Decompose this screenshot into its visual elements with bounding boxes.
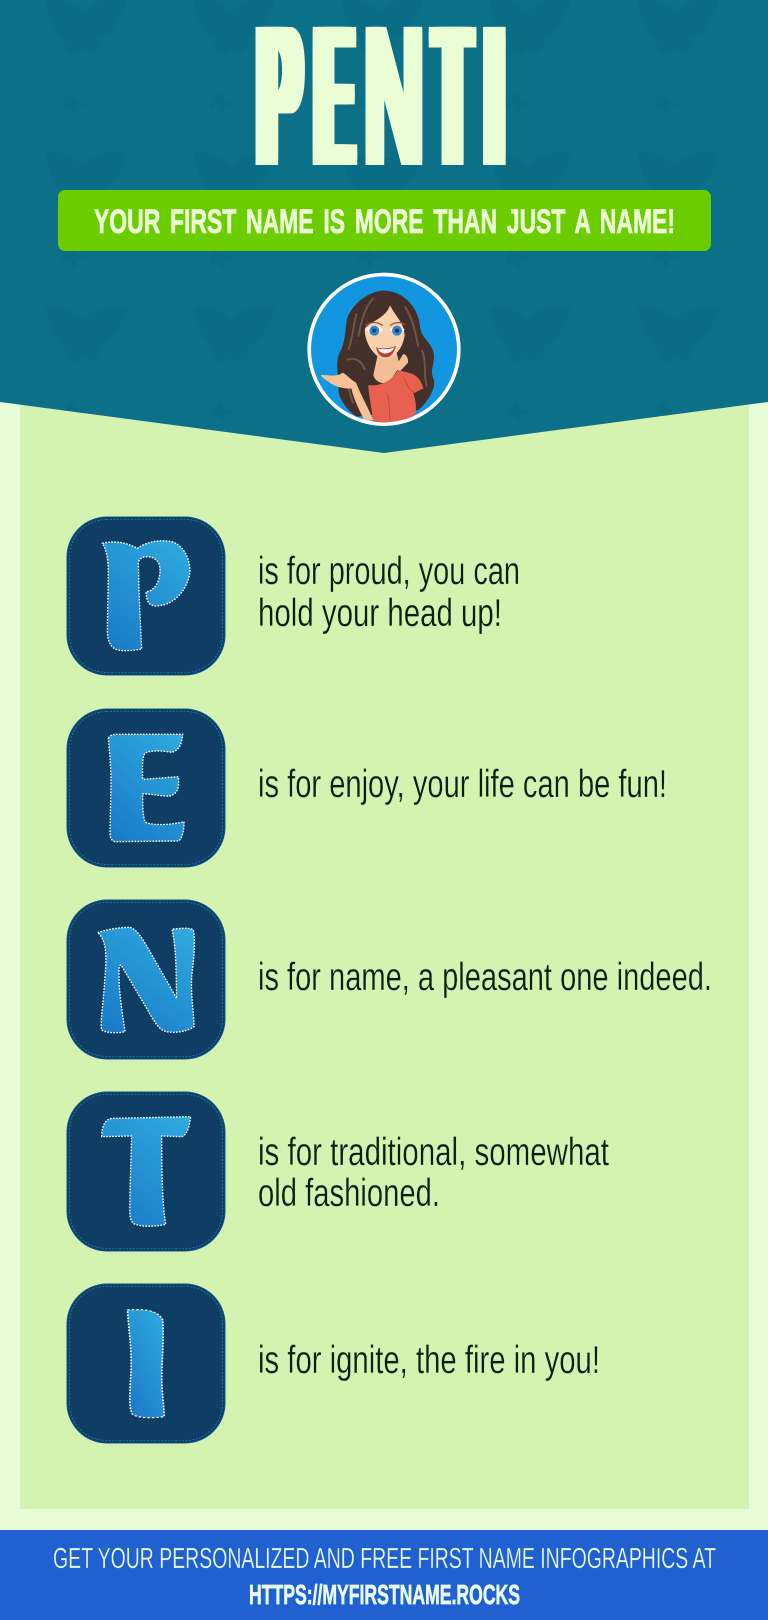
text: T line: old fashioned. (258, 1172, 440, 1215)
text: I line: is for ignite, the fire in you! (258, 1339, 600, 1382)
footer (0, 1530, 768, 1620)
letter row: I (67, 1284, 600, 1443)
text: T line: is for traditional, somewhat (258, 1131, 609, 1174)
letter row: P (67, 517, 520, 675)
icon: letter N tile (67, 900, 225, 1059)
icon: letter E tile (67, 709, 225, 867)
banner (58, 190, 711, 251)
text: P line (258, 550, 520, 635)
letter row: N (67, 900, 712, 1059)
icon: letter I tile (67, 1284, 225, 1443)
text: P line: hold your head up! (258, 592, 502, 635)
letter row: T (67, 1092, 609, 1251)
icon: letter P tile (67, 517, 225, 675)
title (256, 0, 506, 180)
icon: avatar woman (307, 273, 461, 426)
content panel (20, 380, 749, 1509)
icon: letter T tile (67, 1092, 225, 1251)
footer url: HTTPS://MYFIRSTNAME.ROCKS (249, 1579, 520, 1610)
text: P line: is for proud, you can (258, 550, 520, 593)
text: T line (258, 1131, 609, 1215)
header band with chevron (0, 0, 768, 453)
letter row: E (67, 709, 667, 867)
